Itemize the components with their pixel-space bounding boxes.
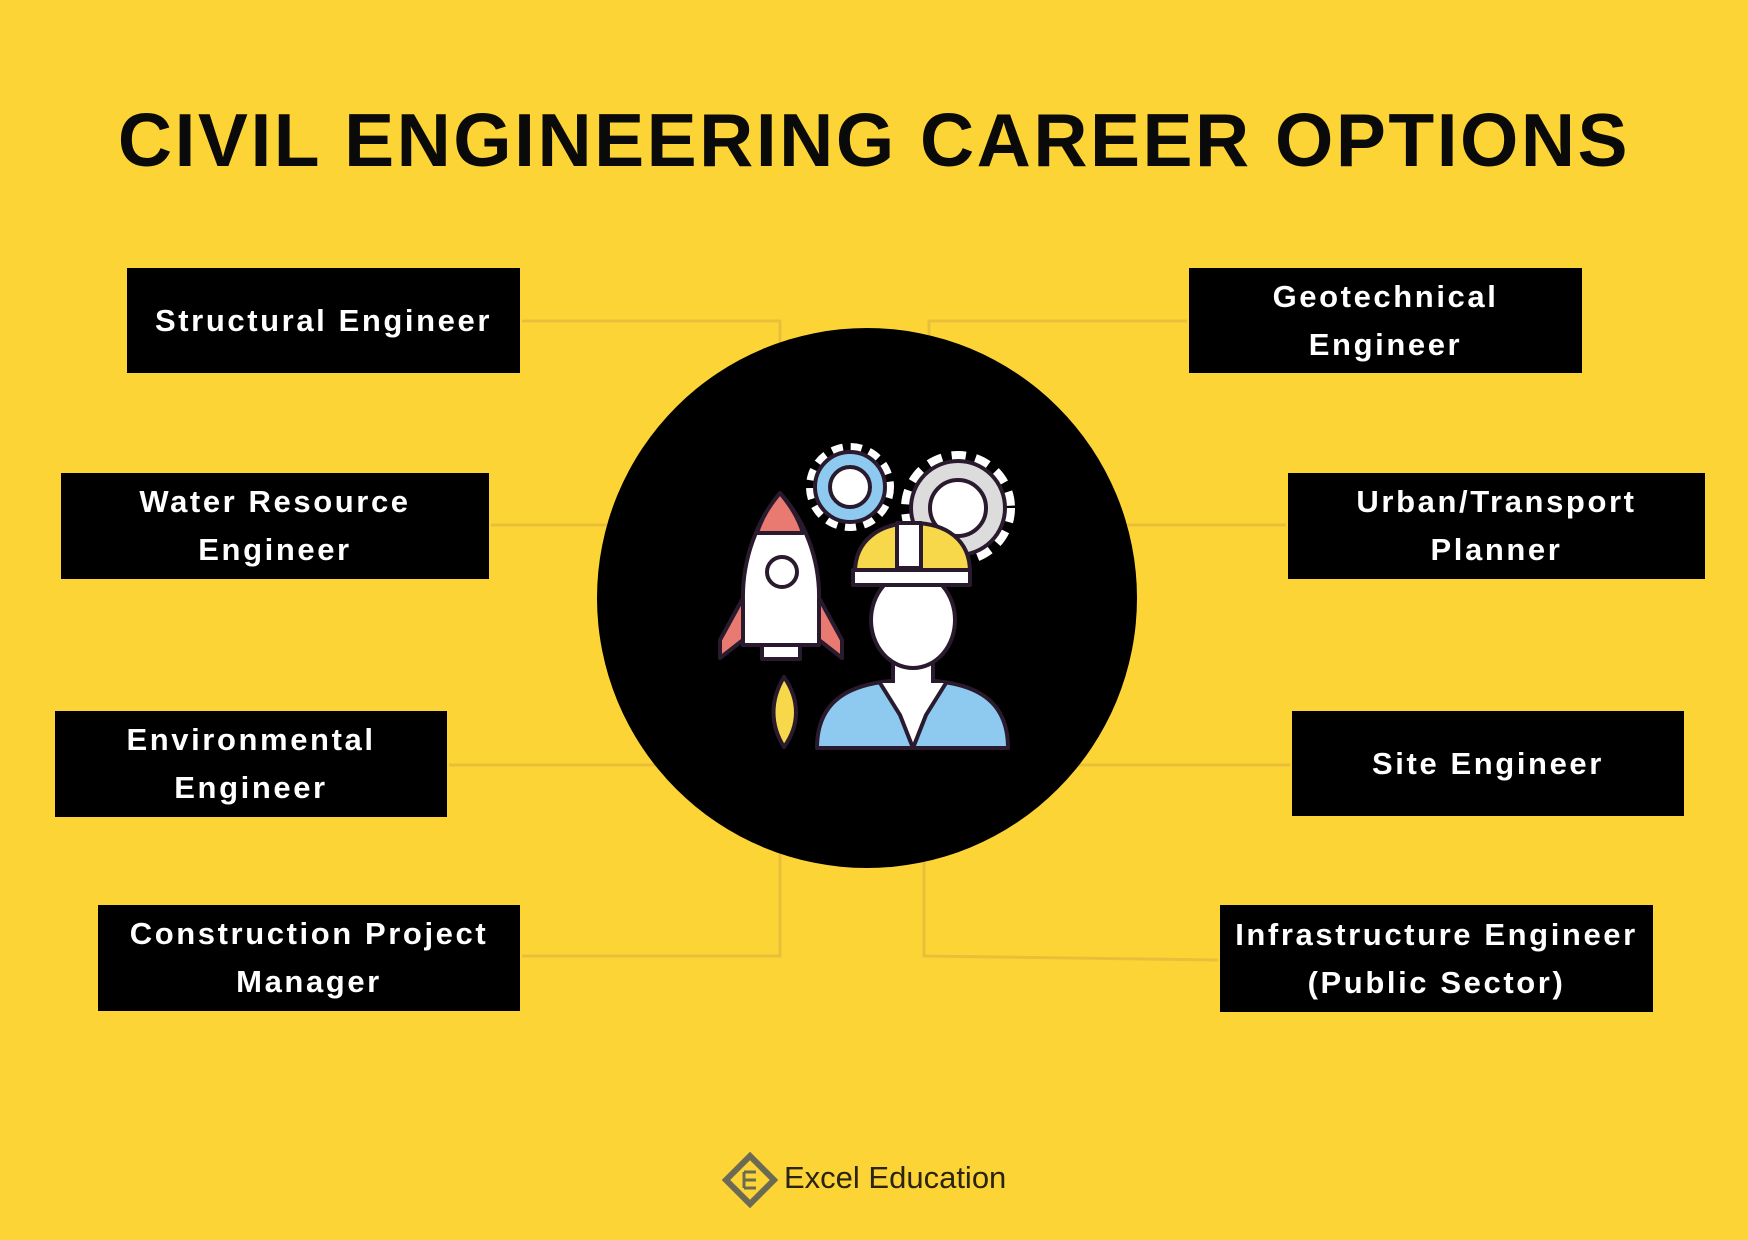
box: Geotechnical Engineer: Geotechnical <box>1273 278 1498 314</box>
box: Water Resource Engineer: Water Resource <box>139 484 411 519</box>
box: Construction Project Manager <box>98 905 520 1011</box>
box: Infrastructure Engineer <box>1220 905 1653 1012</box>
box: Environmental Engineer: Engineer <box>174 770 328 805</box>
box: Construction Project Manager: Construction Project <box>130 916 488 951</box>
icon: gray gear <box>910 460 1006 556</box>
box: Site Engineer: Site Engineer <box>1372 746 1604 780</box>
logo text: Excel Education <box>784 1160 1006 1195</box>
box: Urban/Transport Planner <box>1288 473 1705 579</box>
box: Environmental Engineer <box>55 711 447 817</box>
central circle with engineer icon <box>597 328 1137 868</box>
box: Infrastructure Engineer: (Public Sector) <box>1308 964 1565 1000</box>
box: Water Resource Engineer: Engineer <box>198 532 352 567</box>
icon: rocket <box>720 493 842 747</box>
box: Urban/Transport Planner: Urban/Transport <box>1356 484 1637 519</box>
box: Site Engineer <box>1292 711 1684 816</box>
icon: engineer <box>817 523 1008 748</box>
box: Construction Project Manager: Manager <box>236 964 382 999</box>
box: Structural Engineer: Structural Engineer <box>155 302 492 338</box>
box: Structural Engineer <box>127 268 520 373</box>
box: Environmental Engineer: Environmental <box>126 722 376 757</box>
title: CIVIL ENGINEERING CAREER OPTIONS <box>118 98 1630 182</box>
box: Urban/Transport Planner: Planner <box>1431 532 1562 567</box>
box: Water Resource Engineer <box>61 473 489 579</box>
box: Geotechnical Engineer <box>1189 268 1582 373</box>
logo: Excel Education <box>722 1152 1006 1208</box>
box: Infrastructure Engineer: Infrastructure Engineer <box>1235 916 1638 952</box>
icon: blue gear <box>814 451 886 523</box>
icon: logo diamond <box>722 1152 778 1208</box>
box: Geotechnical Engineer: Engineer <box>1309 326 1462 362</box>
